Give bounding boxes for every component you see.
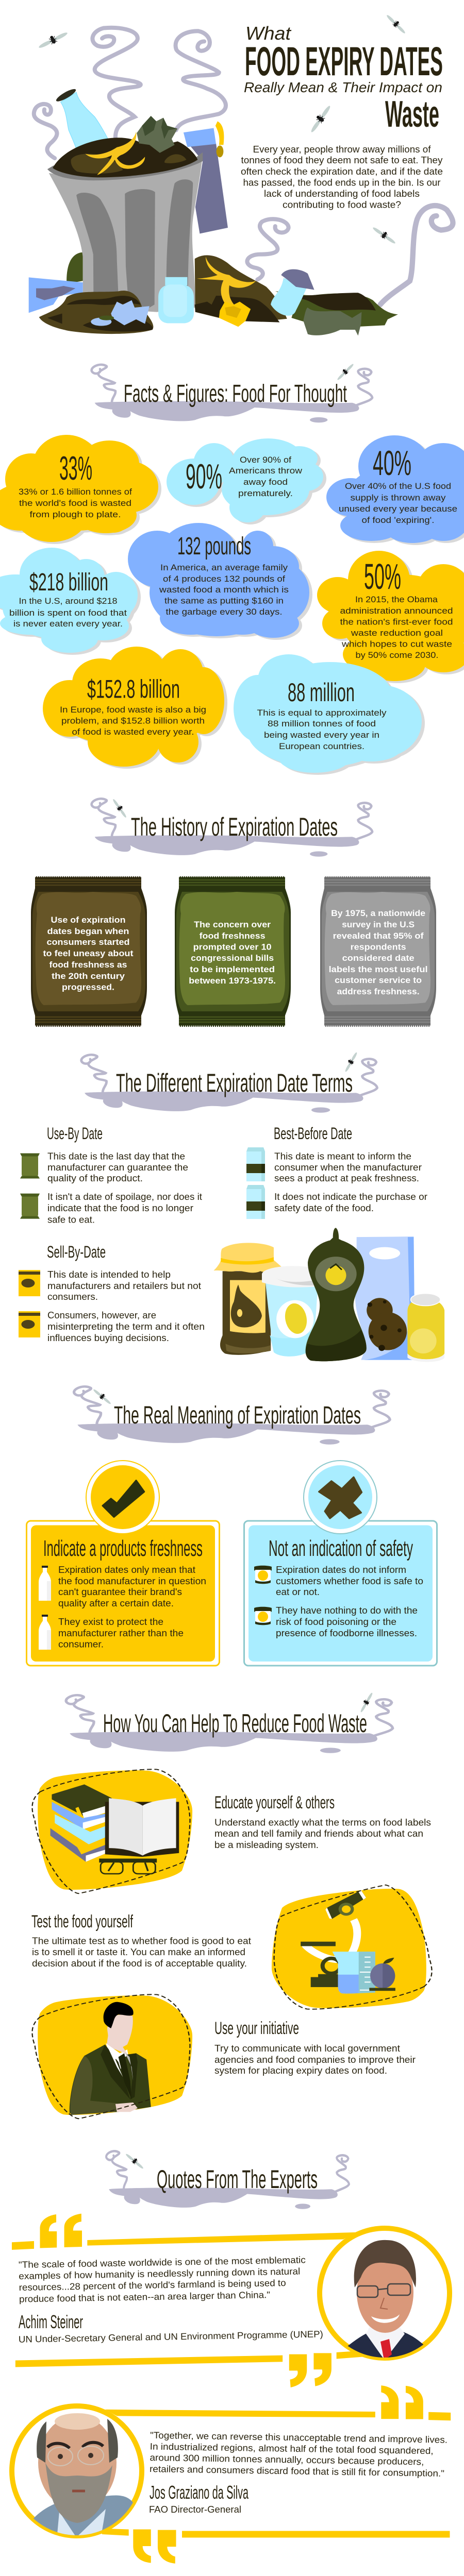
quote frame: Achim Steiner bbox=[12, 2214, 450, 2387]
panel: indicate freshness: quality after a certain date. bbox=[58, 1598, 174, 1608]
panel: grey food packet: customer service to bbox=[335, 975, 422, 985]
panel: brown food packet: consumers started bbox=[46, 937, 130, 947]
panel: brown food packet: the 20th century bbox=[52, 971, 125, 981]
panel: indicate freshness: the food manufacturer in question bbox=[58, 1576, 206, 1586]
icon: check mark bbox=[86, 1461, 159, 1534]
text block: test the food bbox=[31, 1912, 251, 1969]
panel: not an indication of safety: eat or not. bbox=[276, 1587, 320, 1597]
panel: 90% cloud: prematurely. bbox=[238, 488, 293, 498]
text block: test the food: The ultimate test as to whether food is good to eat bbox=[32, 1936, 251, 1946]
icon: green packet bbox=[20, 1194, 40, 1219]
panel: green food packet: congressional bills bbox=[191, 953, 274, 963]
title: Really Mean & Their Impact on bbox=[244, 79, 442, 95]
text block: use-by date: manufacturer can guarantee the bbox=[47, 1162, 188, 1173]
panel: brown food packet: to feel uneasy about bbox=[43, 948, 134, 958]
panel: 40% cloud: unused every year because bbox=[339, 504, 457, 514]
text block: educate yourself: be a misleading system. bbox=[214, 1840, 319, 1850]
icon: can bbox=[254, 1566, 272, 1584]
text block: best-before date: consumer when the manufacturer bbox=[274, 1162, 422, 1173]
panel: 50% cloud: the nation's first-ever food bbox=[340, 617, 453, 627]
panel: 88 million cloud: This is equal to approximately bbox=[257, 708, 387, 718]
quote text: around 300 million tonnes annually, occurs because producers, bbox=[150, 2452, 424, 2467]
quote text: resources...28 percent of the world's farmland is being used to bbox=[19, 2278, 286, 2293]
panel: $152.8 billion cloud bbox=[43, 647, 224, 767]
text block: test the food: is to smell it or taste it. You can make an informed bbox=[32, 1947, 245, 1957]
quote text: retailers and consumers discard food that is still fit for consumption." bbox=[150, 2464, 444, 2479]
panel: grey food packet: considered date bbox=[342, 953, 415, 963]
panel: 40% cloud: supply is thrown away bbox=[351, 493, 446, 503]
panel: 90% cloud: away food bbox=[243, 477, 288, 487]
quote text bbox=[19, 2255, 306, 2304]
text block: educate yourself bbox=[214, 1793, 431, 1850]
text block: sell-by date: This date is intended to help bbox=[47, 1269, 171, 1280]
text block: use-by date: It isn't a date of spoilage, nor does it bbox=[47, 1192, 202, 1202]
icon: yellow box bbox=[19, 1270, 40, 1296]
panel: indicate freshness: Indicate a products freshness bbox=[43, 1536, 203, 1561]
smoke swirls bbox=[34, 28, 453, 304]
icon: yellow box bbox=[19, 1311, 40, 1337]
intro paragraph: tonnes of food they deem not safe to eat. They bbox=[241, 155, 442, 165]
hero illustration: overflowing trash can bbox=[29, 28, 453, 335]
text block: use-by date: This date is the last day that the bbox=[47, 1151, 185, 1161]
text block: best-before date: This date is meant to inform the bbox=[274, 1151, 411, 1161]
panel: brown food packet: Use of expiration bbox=[51, 915, 126, 925]
photo: Jos Graziano da Silva portrait bbox=[33, 2413, 133, 2535]
text block: sell-by date bbox=[19, 1243, 205, 1343]
panel: 50% cloud: administration announced bbox=[340, 606, 453, 616]
quote text: examples of how humanity is needlessly running down its natural bbox=[19, 2266, 300, 2281]
text block: educate yourself: Understand exactly what the terms on food labels bbox=[214, 1818, 431, 1828]
quote frame: Jos Graziano da Silva bbox=[12, 2385, 451, 2564]
panel: 88 million cloud: being wasted every year in bbox=[264, 730, 379, 740]
panel: green food packet bbox=[175, 876, 291, 1027]
panel: not an indication of safety bbox=[244, 1461, 437, 1666]
panel: 40% cloud: of food 'expiring'. bbox=[362, 515, 434, 525]
panel: 132 pounds cloud: of 4 produces 132 pounds of bbox=[163, 574, 285, 584]
quote text bbox=[150, 2430, 448, 2479]
panel: 132 pounds cloud bbox=[128, 523, 309, 638]
icon: green packet bbox=[20, 1153, 40, 1179]
panel: 33% cloud: 33% or 1.6 billion tonnes of bbox=[19, 487, 132, 497]
icon: white bottle bbox=[39, 1566, 51, 1601]
icon: cross bbox=[304, 1461, 377, 1534]
panel: $152.8 billion cloud: In Europe, food waste is also a big bbox=[60, 705, 206, 715]
panel: $152.8 billion cloud: problem, and $152.8 billion worth bbox=[61, 716, 205, 725]
heading: quotes: Quotes From The Experts bbox=[157, 2165, 318, 2194]
title: What bbox=[245, 23, 292, 44]
panel: 132 pounds cloud: In America, an average family bbox=[160, 563, 288, 572]
icon: white bottle bbox=[39, 1615, 51, 1650]
photo: Achim Steiner portrait bbox=[347, 2240, 424, 2358]
panel: brown food packet: progressed. bbox=[62, 982, 114, 992]
panel: 88 million cloud: 88 million bbox=[288, 678, 355, 707]
panel: 50% cloud: In 2015, the Obama bbox=[355, 595, 438, 604]
text block: sell-by date: misinterpreting the term and it often bbox=[47, 1321, 205, 1332]
panel: indicate freshness: consumer. bbox=[58, 1639, 104, 1649]
panel: not an indication of safety: customers whether food is safe to bbox=[276, 1576, 423, 1586]
panel: 40% cloud: Over 40% of the U.S food bbox=[345, 481, 451, 491]
text block: sell-by date: Sell-By-Date bbox=[47, 1243, 106, 1261]
panel: $218 billion cloud: is never eaten every year. bbox=[13, 619, 123, 629]
text block: use your initiative: agencies and food companies to improve their bbox=[214, 2055, 416, 2065]
panel: $152.8 billion cloud: of food is wasted every year. bbox=[72, 727, 194, 737]
panel: 50% cloud bbox=[317, 551, 464, 681]
panel: not an indication of safety: risk of food poisoning or the bbox=[276, 1617, 396, 1627]
heading: real meaning bbox=[74, 1386, 390, 1445]
icon: can bbox=[254, 1607, 272, 1625]
heading: different terms bbox=[81, 1051, 377, 1113]
expert name: Achim Steiner bbox=[19, 2311, 83, 2332]
heading: history bbox=[92, 798, 372, 857]
expert title: UN Under-Secretary General and UN Environment Programme (UNEP) bbox=[19, 2329, 323, 2345]
text block: use your initiative: system for placing expiry dates on food. bbox=[214, 2065, 387, 2076]
panel: 33% cloud bbox=[0, 435, 158, 542]
panel: $218 billion cloud: In the U.S, around $218 bbox=[19, 596, 117, 606]
panel: brown food packet bbox=[31, 876, 147, 1027]
panel: 90% cloud: 90% bbox=[186, 457, 222, 496]
text block: best-before date bbox=[246, 1124, 427, 1219]
panel: 88 million cloud: 88 million tonnes of food bbox=[268, 719, 376, 728]
quote text: produce food that is not eaten--an area larger than China." bbox=[19, 2290, 270, 2304]
panel: indicate freshness: can't guarantee their brand's bbox=[58, 1587, 182, 1597]
panel: 33% cloud: the world's food is wasted bbox=[19, 498, 131, 508]
illustration: microscope on yellow blob bbox=[272, 1885, 432, 2009]
text block: best-before date: sees a product at peak freshness. bbox=[274, 1173, 419, 1183]
panel: 90% cloud bbox=[167, 438, 323, 522]
panel: 132 pounds cloud: the garbage every 30 days. bbox=[166, 607, 283, 617]
panel: $218 billion cloud: $218 billion bbox=[29, 569, 108, 596]
text block: test the food: Test the food yourself bbox=[31, 1912, 133, 1931]
text block: use-by date: safe to eat. bbox=[47, 1215, 95, 1225]
intro paragraph: Every year, people throw away millions of bbox=[253, 144, 432, 155]
text block: sell-by date: manufacturers and retailers but not bbox=[47, 1281, 201, 1291]
heading: facts and figures bbox=[92, 362, 372, 422]
panel: grey food packet: address freshness. bbox=[337, 987, 420, 996]
fly icons around the hero bbox=[37, 12, 408, 246]
panel: green food packet: prompted over 10 bbox=[193, 942, 272, 952]
panel: 88 million cloud bbox=[234, 654, 422, 773]
panel: grey food packet: survey in the U.S bbox=[342, 920, 415, 929]
panel: 50% cloud: waste reduction goal bbox=[351, 628, 443, 638]
panel: not an indication of safety: presence of foodborne illnesses. bbox=[276, 1628, 417, 1638]
illustration: books on yellow blob bbox=[32, 1769, 192, 1893]
text block: sell-by date: consumers. bbox=[47, 1292, 98, 1302]
text block: use-by date: indicate that the food is no longer bbox=[47, 1203, 193, 1213]
text block: best-before date: Best-Before Date bbox=[274, 1124, 352, 1143]
icon: milk carton bbox=[246, 1185, 265, 1219]
panel: green food packet: to be implemented bbox=[190, 964, 275, 974]
panel: 90% cloud: Over 90% of bbox=[240, 455, 291, 465]
panel: grey food packet: revealed that 95% of bbox=[333, 931, 424, 941]
intro paragraph: often check the expiration date, and if the date bbox=[241, 166, 443, 177]
text block: use your initiative bbox=[214, 2019, 416, 2076]
heading: how you can help bbox=[66, 1691, 393, 1753]
panel: $152.8 billion cloud: $152.8 billion bbox=[87, 675, 180, 704]
panel: $218 billion cloud: billion is spent on food that bbox=[9, 608, 127, 618]
panel: $218 billion cloud bbox=[0, 548, 138, 653]
panel: 33% cloud: 33% bbox=[59, 449, 92, 487]
heading: quotes bbox=[106, 2151, 349, 2209]
panel: brown food packet: food freshness as bbox=[49, 960, 127, 970]
panel: not an indication of safety: Expiration dates do not inform bbox=[276, 1565, 406, 1575]
panel: 40% cloud: 40% bbox=[373, 444, 411, 483]
icon: milk carton bbox=[246, 1147, 265, 1181]
panel: green food packet: The concern over bbox=[194, 920, 271, 929]
intro paragraph bbox=[241, 144, 443, 210]
text block: use-by date bbox=[20, 1124, 202, 1225]
text block: best-before date: It does not indicate the purchase or bbox=[274, 1192, 427, 1202]
panel: indicate freshness: Expiration dates only mean that bbox=[58, 1565, 195, 1575]
text block: educate yourself: Educate yourself & others bbox=[214, 1793, 335, 1812]
panel: 90% cloud: Americans throw bbox=[229, 466, 303, 476]
text block: use-by date: Use-By Date bbox=[47, 1124, 103, 1143]
expert title: FAO Director-General bbox=[149, 2504, 241, 2515]
panel: 132 pounds cloud: wasted food a month which is bbox=[159, 585, 289, 595]
panel: indicate freshness: manufacturer rather than the bbox=[58, 1628, 184, 1638]
text block: use your initiative: Try to communicate with local government bbox=[214, 2043, 400, 2054]
panel: grey food packet: respondents bbox=[351, 942, 406, 952]
illustration: businessman on yellow blob bbox=[32, 1994, 192, 2119]
text block: sell-by date: Consumers, however, are bbox=[47, 1310, 156, 1320]
panel: indicate freshness: They exist to protect the bbox=[58, 1617, 163, 1627]
panel: green food packet: food freshness bbox=[200, 931, 266, 941]
panel: not an indication of safety: They have nothing to do with the bbox=[276, 1605, 418, 1616]
panel: 132 pounds cloud: the same as putting $160 in bbox=[164, 596, 284, 606]
panel: grey food packet bbox=[320, 876, 436, 1027]
panel: 50% cloud: which hopes to cut waste bbox=[341, 639, 452, 649]
panel: 33% cloud: from plough to plate. bbox=[30, 510, 121, 519]
text block: best-before date: safety date of the food. bbox=[274, 1203, 374, 1213]
intro paragraph: has passed, the food ends up in the bin. Is our bbox=[243, 177, 440, 188]
panel: 40% cloud bbox=[326, 435, 464, 543]
quote text: In industrialized regions, almost half of the total food squandered, bbox=[150, 2441, 434, 2456]
text block: educate yourself: mean and tell family and friends about what can bbox=[214, 1828, 423, 1839]
quote text: "The scale of food waste worldwide is one of the most emblematic bbox=[19, 2255, 306, 2270]
expert name: Jos Graziano da Silva bbox=[150, 2482, 249, 2503]
intro paragraph: lack of understanding of food labels bbox=[264, 189, 420, 199]
text block: use your initiative: Use your initiative bbox=[214, 2019, 299, 2038]
quote text: "Together, we can reverse this unacceptable trend and improve lives. bbox=[150, 2430, 448, 2445]
text block: sell-by date: influences buying decisions. bbox=[47, 1333, 169, 1343]
panel: 132 pounds cloud: 132 pounds bbox=[177, 533, 251, 560]
panel: 50% cloud: 50% bbox=[364, 556, 401, 597]
panel: indicate freshness bbox=[27, 1461, 220, 1666]
text block: use-by date: quality of the product. bbox=[47, 1173, 143, 1183]
intro paragraph: contributing to food waste? bbox=[283, 200, 401, 210]
panel: brown food packet: dates began when bbox=[47, 926, 129, 936]
panel: green food packet: between 1973-1975. bbox=[189, 976, 276, 986]
panel: 88 million cloud: European countries. bbox=[279, 741, 364, 751]
illustration: grocery products bbox=[213, 1228, 444, 1362]
panel: grey food packet: By 1975, a nationwide bbox=[331, 908, 425, 918]
panel: 50% cloud: by 50% come 2030. bbox=[356, 650, 438, 660]
title bbox=[244, 23, 443, 135]
text block: test the food: decision about if the food is of acceptable quality. bbox=[32, 1958, 247, 1969]
panel: grey food packet: labels the most useful bbox=[329, 964, 428, 974]
